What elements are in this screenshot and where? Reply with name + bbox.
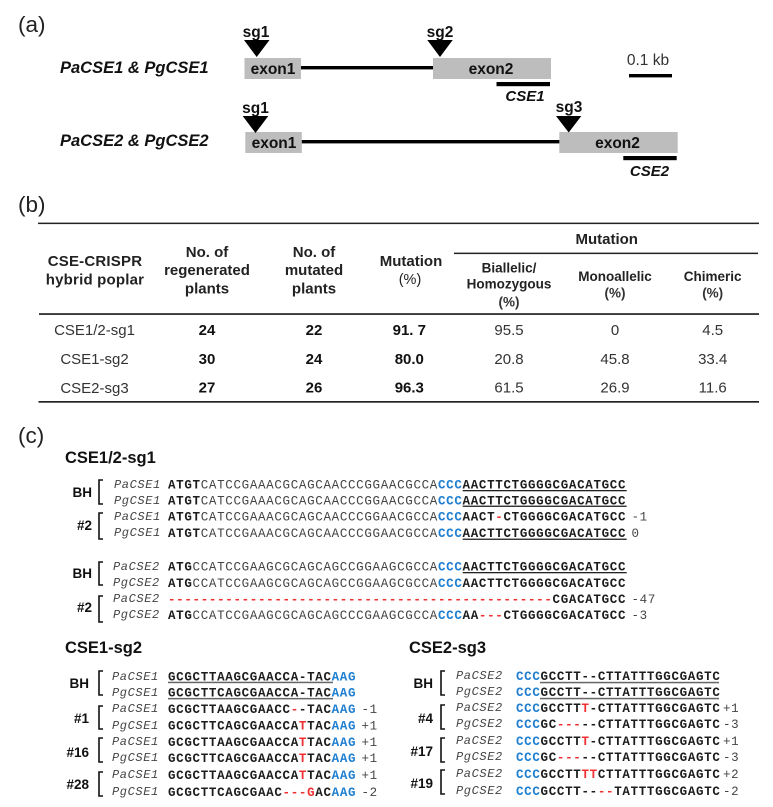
CSE1 sequences: ATGTCATCCGAAACGCAGCAACCCGGAACGCCACCCAACTTCTGGGGCGACATGCC	[168, 527, 626, 541]
sequences: +1	[362, 720, 378, 734]
sequences: -2	[362, 786, 378, 800]
column header: biallelic: Biallelic/	[482, 261, 536, 276]
panel label c: (c)	[18, 423, 44, 448]
CSE2 sequences: PaCSE2	[113, 592, 160, 606]
gene model: CSE1: CSE1	[505, 88, 545, 105]
sequences: GCGCTTAAGCGAACCATTACAAG	[168, 736, 356, 750]
sample labels and brackets	[410, 671, 445, 794]
sequences: -3	[723, 718, 739, 732]
sequences: CCCGC-----CTTATTTGGCGAGTC	[516, 718, 721, 732]
marker: sg2 on CSE1: sg2	[427, 24, 453, 41]
CSE1 sequences: 0	[632, 527, 640, 541]
table row: CSE1/2-sg1: 24	[199, 322, 216, 339]
table row: CSE2-sg3: 27	[199, 380, 215, 397]
heading: CSE1-sg2	[65, 639, 142, 657]
sequences: GCGCTTCAGCGAAC---GACAAG	[168, 786, 356, 800]
table row: CSE1/2-sg1: 4.5	[702, 322, 723, 339]
sample labels and brackets: BH	[72, 566, 92, 581]
sequences: PaCSE1	[112, 768, 159, 782]
table row: CSE1/2-sg1: 95.5	[494, 322, 524, 339]
table row: CSE1-sg2: 30	[199, 351, 215, 368]
column header: mutated plants: mutated	[285, 262, 343, 279]
CSE1 sequences: PaCSE1	[114, 510, 161, 524]
sample labels and brackets	[66, 671, 103, 796]
panel label b: (b)	[18, 192, 46, 217]
spanning header: mutation: Mutation	[575, 231, 638, 248]
gene name: PaCSE2 & PgCSE2: PaCSE2 & PgCSE2	[60, 132, 209, 150]
table row: CSE1-sg2: 33.4	[698, 351, 727, 368]
CSE2 sequences: ATGCCATCCGAAGCGCAGCAGCCGGAAGCGCCACCCAACTTCTGGGGCGACATGCC	[168, 560, 626, 574]
column header: monoallelic: Monoallelic	[578, 269, 652, 284]
table row: CSE1/2-sg1	[54, 322, 723, 339]
sequences: +2	[723, 768, 739, 782]
CSE1 sequences: PgCSE1	[114, 494, 161, 508]
panel label a: (a)	[18, 12, 46, 37]
table row: CSE1-sg2	[60, 351, 727, 368]
sequences: GCGCTTCAGCGAACCATTACAAG	[168, 720, 356, 734]
gene model: CSE1	[244, 58, 551, 105]
CSE1 sequences	[114, 478, 648, 541]
marker: sg1 on CSE1: sg1	[243, 24, 270, 41]
section: CSE2-sg3 alignment	[409, 639, 739, 799]
table row: CSE2-sg3: 61.5	[494, 380, 524, 397]
sequences: GCGCTTCAGCGAACCA-TACAAG	[168, 686, 356, 700]
column header: chimeric: (%)	[702, 286, 723, 301]
sequences: CCCGC-----CTTATTTGGCGAGTC	[516, 751, 721, 765]
CSE1 sequences: ATGTCATCCGAAACGCAGCAACCCGGAACGCCACCCAACTTCTGGGGCGACATGCC	[168, 494, 626, 508]
table row: CSE1-sg2: 45.8	[600, 351, 630, 368]
sequences: +1	[362, 769, 378, 783]
sequences: PgCSE2	[456, 717, 503, 731]
column header: regenerated plants: No. of	[186, 244, 228, 261]
sequences: PaCSE1	[112, 670, 159, 684]
gene model: CSE1: exon2	[469, 61, 513, 78]
marker: sg3 on CSE2	[556, 99, 583, 132]
CSE2 sequences: -----------------------------------------------CGACATGCC	[168, 593, 626, 607]
sequences: -3	[723, 751, 739, 765]
table row: CSE2-sg3: 26	[306, 380, 322, 397]
CSE2 sequences: PgCSE2	[113, 608, 160, 622]
marker: sg2 on CSE1	[427, 24, 453, 57]
sequences: PaCSE2	[456, 669, 503, 683]
column header: line: hybrid poplar	[46, 271, 144, 288]
section: CSE1/2-sg1 alignment	[65, 449, 656, 623]
CSE2 sequences: ATGCCATCCGAAGCGCAGCAGCCCGAAGCGCCACCCAA---CTGGGGCGACATGCC	[168, 609, 626, 623]
sample labels and brackets: #2	[77, 518, 92, 533]
sequences: CCCGCCTT----TATTTGGCGAGTC	[516, 785, 721, 799]
column header: biallelic: (%)	[498, 295, 520, 310]
sequences: PaCSE1	[112, 702, 159, 716]
sequences: CCCGCCTT--CTTATTTGGCGAGTC	[516, 686, 721, 700]
column header: line: CSE-CRISPR	[48, 253, 142, 270]
table row: CSE2-sg3	[60, 380, 727, 397]
panel: (b) mutation table	[18, 192, 759, 403]
sequences: -1	[362, 703, 378, 717]
sequences: PgCSE1	[112, 686, 159, 700]
sequences: GCGCTTAAGCGAACC--TACAAG	[168, 703, 356, 717]
sequences: CCCGCCTTT-CTTATTTGGCGAGTC	[516, 735, 721, 749]
table row: CSE2-sg3: CSE2-sg3	[60, 380, 129, 397]
sequences: PaCSE2	[456, 767, 503, 781]
sample labels and brackets: BH	[70, 676, 89, 691]
table row: CSE1-sg2: 24	[306, 351, 323, 368]
sequences: CCCGCCTTTTCTTATTTGGCGAGTC	[516, 768, 721, 782]
sequences: GCGCTTCAGCGAACCATTACAAG	[168, 752, 356, 766]
CSE1 sequences: PaCSE1	[114, 478, 161, 492]
sequences: PaCSE1	[112, 735, 159, 749]
column header: regenerated plants: plants	[185, 280, 229, 298]
CSE1 sequences: -1	[632, 510, 648, 524]
column header: biallelic: Homozygous	[467, 276, 551, 292]
sequences: PgCSE1	[112, 751, 159, 765]
sample labels and brackets: #19	[410, 776, 433, 791]
column header: chimeric: Chimeric	[684, 269, 742, 284]
gene model: CSE2: CSE2	[630, 163, 670, 180]
table row: CSE1-sg2: CSE1-sg2	[60, 351, 129, 368]
marker: sg1 on CSE2	[242, 100, 269, 133]
heading: CSE1/2-sg1	[65, 449, 156, 467]
table row: CSE2-sg3: 11.6	[699, 380, 727, 397]
table row: CSE1/2-sg1: CSE1/2-sg1	[54, 322, 135, 339]
CSE2 sequences: -47	[632, 593, 656, 607]
column header: mutated plants: plants	[292, 280, 336, 298]
sample labels and brackets: #1	[74, 711, 89, 726]
sequences: +1	[723, 702, 739, 716]
sequences: PgCSE1	[112, 719, 159, 733]
sample labels and brackets: BH	[72, 485, 92, 500]
CSE2 sequences: PaCSE2	[113, 560, 160, 574]
sequences: -2	[723, 785, 739, 799]
scale bar	[627, 52, 672, 77]
column header: mutation percent: (%)	[399, 272, 421, 288]
gene name: PaCSE1 & PgCSE1: PaCSE1 & PgCSE1	[60, 59, 209, 77]
column header: regenerated plants: regenerated	[164, 262, 250, 279]
gene model: CSE1: exon1	[251, 61, 296, 78]
sequences: PgCSE2	[456, 685, 503, 699]
column header: monoallelic: (%)	[604, 286, 626, 301]
sequences: +1	[723, 735, 739, 749]
sequences: CCCGCCTTT-CTTATTTGGCGAGTC	[516, 702, 721, 716]
sample labels and brackets: #2	[77, 600, 92, 615]
gene model: CSE2	[245, 132, 678, 180]
column header: mutated plants: No. of	[293, 244, 335, 261]
table row: CSE2-sg3: 96.3	[395, 380, 424, 397]
CSE2 sequences: ATGCCATCCGAAGCGCAGCAGCCGGAAGCGCCACCCAACTTCTGGGGCGACATGCC	[168, 577, 626, 591]
CSE2 sequences	[113, 560, 656, 623]
sample labels and brackets: #4	[418, 711, 433, 726]
CSE2 sequences: -3	[632, 609, 648, 623]
section: CSE1-sg2 alignment	[65, 639, 378, 800]
sequences: PaCSE2	[456, 734, 503, 748]
table row: CSE1/2-sg1: 0	[611, 322, 619, 339]
sequences: +1	[362, 752, 378, 766]
sequences: PgCSE1	[112, 785, 159, 799]
sequences: CCCGCCTT--CTTATTTGGCGAGTC	[516, 670, 721, 684]
heading: CSE2-sg3	[409, 639, 486, 657]
sequences	[456, 669, 739, 799]
marker: sg1 on CSE2: sg1	[242, 100, 269, 117]
sequences: PgCSE2	[456, 750, 503, 764]
sample labels and brackets	[72, 480, 103, 622]
CSE1 sequences: PgCSE1	[114, 526, 161, 540]
table row: CSE1-sg2: 20.8	[494, 351, 524, 368]
sequences: PgCSE2	[456, 784, 503, 798]
marker: sg3 on CSE2: sg3	[556, 99, 583, 116]
table row: CSE1-sg2: 80.0	[395, 351, 424, 368]
column header: mutation percent: Mutation	[380, 253, 442, 270]
table row: CSE1/2-sg1: 91. 7	[393, 322, 426, 339]
table row: CSE1/2-sg1: 22	[306, 322, 322, 339]
sample labels and brackets: #28	[66, 777, 89, 792]
sample labels and brackets: BH	[414, 676, 433, 691]
CSE1 sequences: ATGTCATCCGAAACGCAGCAACCCGGAACGCCACCCAACTTCTGGGGCGACATGCC	[168, 478, 626, 492]
CSE2 sequences: PgCSE2	[113, 576, 160, 590]
panel: (c) sequence alignments	[18, 423, 739, 800]
panel: (a) gene structures	[18, 12, 678, 180]
table row: CSE2-sg3: 26.9	[600, 380, 630, 397]
marker: sg1 on CSE1	[243, 24, 270, 57]
sequences: GCGCTTAAGCGAACCA-TACAAG	[168, 670, 356, 684]
scale bar: 0.1 kb	[627, 52, 669, 69]
sequences: +1	[362, 736, 378, 750]
sequences	[112, 670, 378, 800]
gene model: CSE2: exon2	[595, 135, 640, 152]
sample labels and brackets: #16	[66, 745, 89, 760]
CSE1 sequences: ATGTCATCCGAAACGCAGCAACCCGGAACGCCACCCAACT-CTGGGGCGACATGCC	[168, 510, 626, 524]
sequences: PaCSE2	[456, 701, 503, 715]
sequences: GCGCTTAAGCGAACCATTACAAG	[168, 769, 356, 783]
gene model: CSE2: exon1	[252, 135, 297, 152]
sample labels and brackets: #17	[410, 744, 433, 759]
